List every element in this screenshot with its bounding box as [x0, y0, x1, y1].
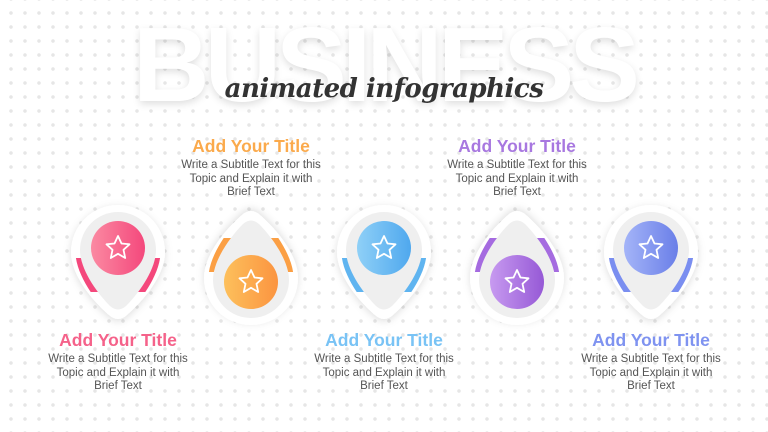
text block 4: Write a Subtitle Text for this	[447, 159, 587, 171]
text block 4: Topic and Explain it with	[456, 172, 578, 184]
text block 5: Write a Subtitle Text for this	[581, 353, 721, 365]
text block 3: Topic and Explain it with	[323, 366, 445, 378]
text block 5: Brief Text	[627, 380, 675, 392]
text block 4	[447, 136, 587, 198]
pins chart	[68, 204, 700, 326]
pin 3 (down)	[337, 205, 431, 319]
text block 1	[48, 330, 188, 392]
text block 4: Brief Text	[493, 186, 541, 198]
text block 3: Brief Text	[360, 380, 408, 392]
text block 2: Brief Text	[227, 186, 275, 198]
title: BUSINESS: BUSINESS	[133, 6, 635, 124]
text block 2: Write a Subtitle Text for this	[181, 159, 321, 171]
text block 5: Add Your Title	[592, 330, 710, 350]
pin 4 (up)	[470, 211, 564, 325]
text block 2: Topic and Explain it with	[190, 172, 312, 184]
text block 3	[314, 330, 454, 392]
text block 5	[581, 330, 721, 392]
text block 2: Add Your Title	[192, 136, 310, 156]
pin 5 (down)	[604, 205, 698, 319]
text block 1: Write a Subtitle Text for this	[48, 353, 188, 365]
text block 1: Brief Text	[94, 380, 142, 392]
text block 3: Add Your Title	[325, 330, 443, 350]
text block 1: Topic and Explain it with	[57, 366, 179, 378]
text block 5: Topic and Explain it with	[590, 366, 712, 378]
pin 2 (up)	[204, 211, 298, 325]
text block 1: Add Your Title	[59, 330, 177, 350]
text block 4: Add Your Title	[458, 136, 576, 156]
text block 2	[181, 136, 321, 198]
subtitle script: animated infographics	[225, 74, 543, 104]
pin 1 (down)	[71, 205, 165, 319]
text block 3: Write a Subtitle Text for this	[314, 353, 454, 365]
